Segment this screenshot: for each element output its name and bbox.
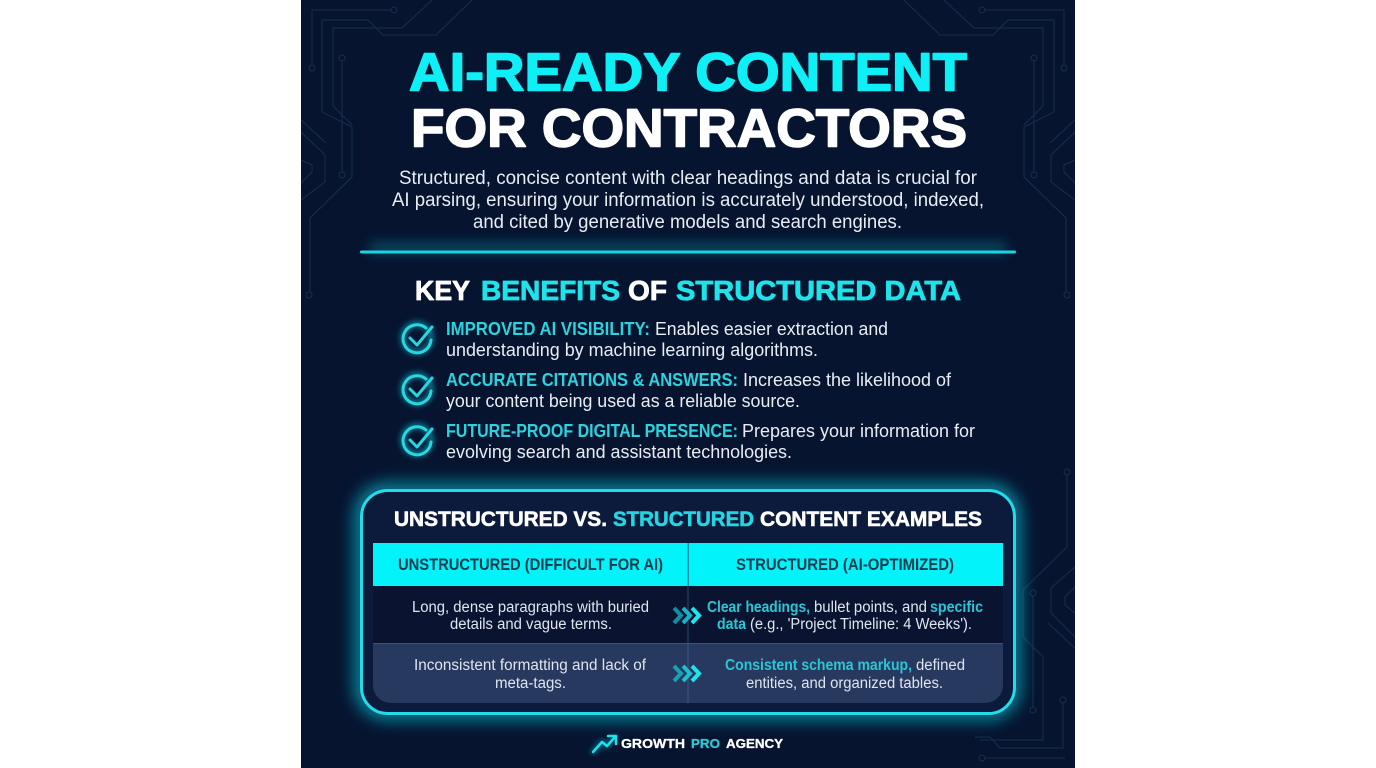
table row 2 xyxy=(373,643,1003,703)
icon: growth arrow xyxy=(593,736,616,752)
poster background xyxy=(301,0,1075,768)
arrow: row 2 chevrons xyxy=(674,666,699,681)
panel heading: UNSTRUCTURED VS. xyxy=(394,507,607,531)
intro paragraph: and cited by generative models and search engines. xyxy=(473,212,902,233)
table row 1: specific xyxy=(930,599,983,616)
benefit 1: improved AI visibility xyxy=(403,319,888,360)
benefit 3: future-proof presence: Prepares your information for xyxy=(742,421,975,441)
panel heading: STRUCTURED xyxy=(613,507,754,531)
table row 2: entities, and organized tables. xyxy=(746,675,943,692)
title: FOR CONTRACTORS xyxy=(411,100,967,158)
table row 1 xyxy=(373,586,1003,643)
icon: check circle xyxy=(403,426,432,455)
table header: STRUCTURED (AI-OPTIMIZED) xyxy=(736,556,954,574)
intro paragraph xyxy=(392,168,984,233)
table row 1: bullet points, and xyxy=(814,599,927,616)
table row 1: data xyxy=(717,616,746,633)
panel heading xyxy=(394,507,982,531)
title: AI-READY CONTENT xyxy=(409,44,967,102)
table row 2: defined xyxy=(916,657,965,674)
benefit 2: accurate citations: your content being used as a reliable source. xyxy=(446,391,800,411)
intro paragraph: AI parsing, ensuring your information is accurately understood, indexed, xyxy=(392,190,984,211)
footer logo: AGENCY xyxy=(726,736,783,751)
benefit 1: improved AI visibility: understanding by machine learning algorithms. xyxy=(446,340,818,360)
background circuit traces xyxy=(301,0,1075,761)
benefit 3: future-proof presence xyxy=(403,421,975,462)
benefit 1: improved AI visibility: Enables easier extraction and xyxy=(655,319,888,339)
title xyxy=(409,44,967,158)
benefits heading: STRUCTURED DATA xyxy=(676,275,961,306)
benefit 2: accurate citations xyxy=(403,370,952,411)
benefit 2: accurate citations: ACCURATE CITATIONS & ANSWERS: xyxy=(446,370,738,390)
table row 2: Inconsistent formatting and lack of xyxy=(414,657,647,674)
arrow: row 1 chevrons xyxy=(674,608,699,623)
table row 2: Consistent schema markup, xyxy=(725,657,912,674)
table row 1: Long, dense paragraphs with buried xyxy=(412,599,649,616)
glowing divider xyxy=(360,243,1016,254)
benefits list xyxy=(403,319,975,462)
benefit 3: future-proof presence: FUTURE-PROOF DIGITAL PRESENCE: xyxy=(446,421,738,441)
table header: UNSTRUCTURED (DIFFICULT FOR AI) xyxy=(398,556,663,574)
benefit 3: future-proof presence: evolving search and assistant technologies. xyxy=(446,442,792,462)
benefits heading: KEY xyxy=(415,275,470,306)
table header xyxy=(373,543,1003,586)
comparison table xyxy=(373,543,1003,703)
footer logo: GROWTH xyxy=(621,736,685,751)
footer logo xyxy=(593,736,783,752)
icon: check circle xyxy=(403,375,432,404)
table row 1: (e.g., 'Project Timeline: 4 Weeks'). xyxy=(750,616,972,633)
benefits heading xyxy=(415,275,961,306)
table row 1: Clear headings, xyxy=(707,599,810,616)
icon: check circle xyxy=(403,324,432,353)
panel: comparison xyxy=(361,490,1014,714)
benefits heading: OF xyxy=(628,275,667,306)
benefits heading: BENEFITS xyxy=(481,275,620,306)
intro paragraph: Structured, concise content with clear headings and data is crucial for xyxy=(399,168,978,189)
benefit 2: accurate citations: Increases the likelihood of xyxy=(743,370,952,390)
table row 1: details and vague terms. xyxy=(450,616,612,633)
panel frame xyxy=(361,490,1014,714)
footer logo: PRO xyxy=(691,736,720,751)
benefit 1: improved AI visibility: IMPROVED AI VISIBILITY: xyxy=(446,319,650,339)
panel heading: CONTENT EXAMPLES xyxy=(760,507,982,531)
table row 2: meta-tags. xyxy=(495,675,566,692)
